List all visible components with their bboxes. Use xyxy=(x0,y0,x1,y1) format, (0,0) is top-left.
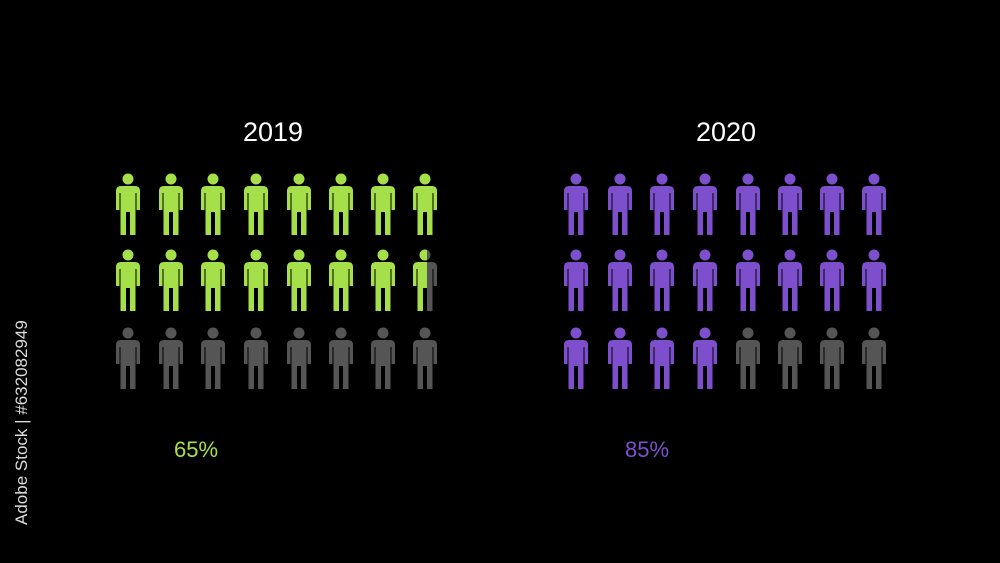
percent: 85%: 85% xyxy=(625,437,669,462)
title: 2020: 2020 xyxy=(696,117,756,147)
icon grids xyxy=(116,174,886,389)
grid: 2019 xyxy=(116,174,437,389)
grid: 2020 xyxy=(564,174,886,389)
percent: 65%: 65% xyxy=(174,437,218,462)
title: 2019: 2019 xyxy=(243,117,303,147)
side watermark text: Adobe Stock | #632082949 xyxy=(12,320,31,525)
